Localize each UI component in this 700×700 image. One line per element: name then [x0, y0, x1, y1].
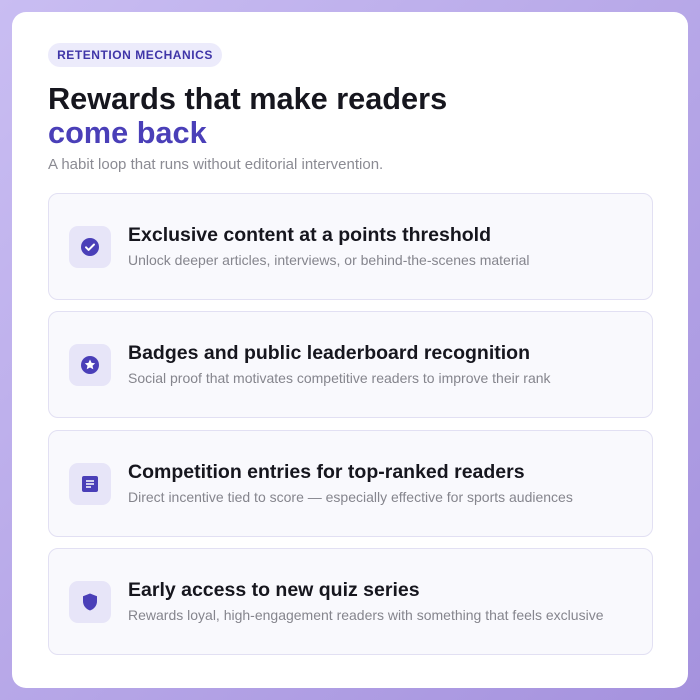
panel: exclusive content: Exclusive content at a points threshold: [128, 224, 491, 246]
panel: early access: Early access to new quiz series: [128, 579, 420, 601]
icon: star: [69, 344, 111, 386]
panel: badges: Social proof that motivates competitive readers to improve their rank: [128, 370, 551, 386]
icon: check: [69, 226, 111, 268]
icon: shield: [69, 581, 111, 623]
panel: early access: Rewards loyal, high-engagement readers with something that feels exclusive: [128, 607, 603, 623]
badge: [48, 43, 222, 67]
badge: RETENTION MECHANICS: [57, 48, 213, 62]
panel: badges: Badges and public leaderboard recognition: [128, 342, 530, 364]
title: Rewards that make readers: [48, 81, 447, 116]
title: [48, 81, 447, 150]
panel: exclusive content: Unlock deeper articles, interviews, or behind-the-scenes material: [128, 252, 530, 268]
icon: document: [69, 463, 111, 505]
panel: badges: [48, 311, 653, 418]
panel: exclusive content: [48, 193, 653, 300]
panel: early access: [48, 548, 653, 655]
panel: competition: Competition entries for top-ranked readers: [128, 461, 525, 483]
panel: competition: [48, 430, 653, 537]
subtitle: A habit loop that runs without editorial intervention.: [48, 156, 383, 173]
title: come back: [48, 115, 207, 150]
panel: competition: Direct incentive tied to score — especially effective for sports audiences: [128, 489, 573, 505]
